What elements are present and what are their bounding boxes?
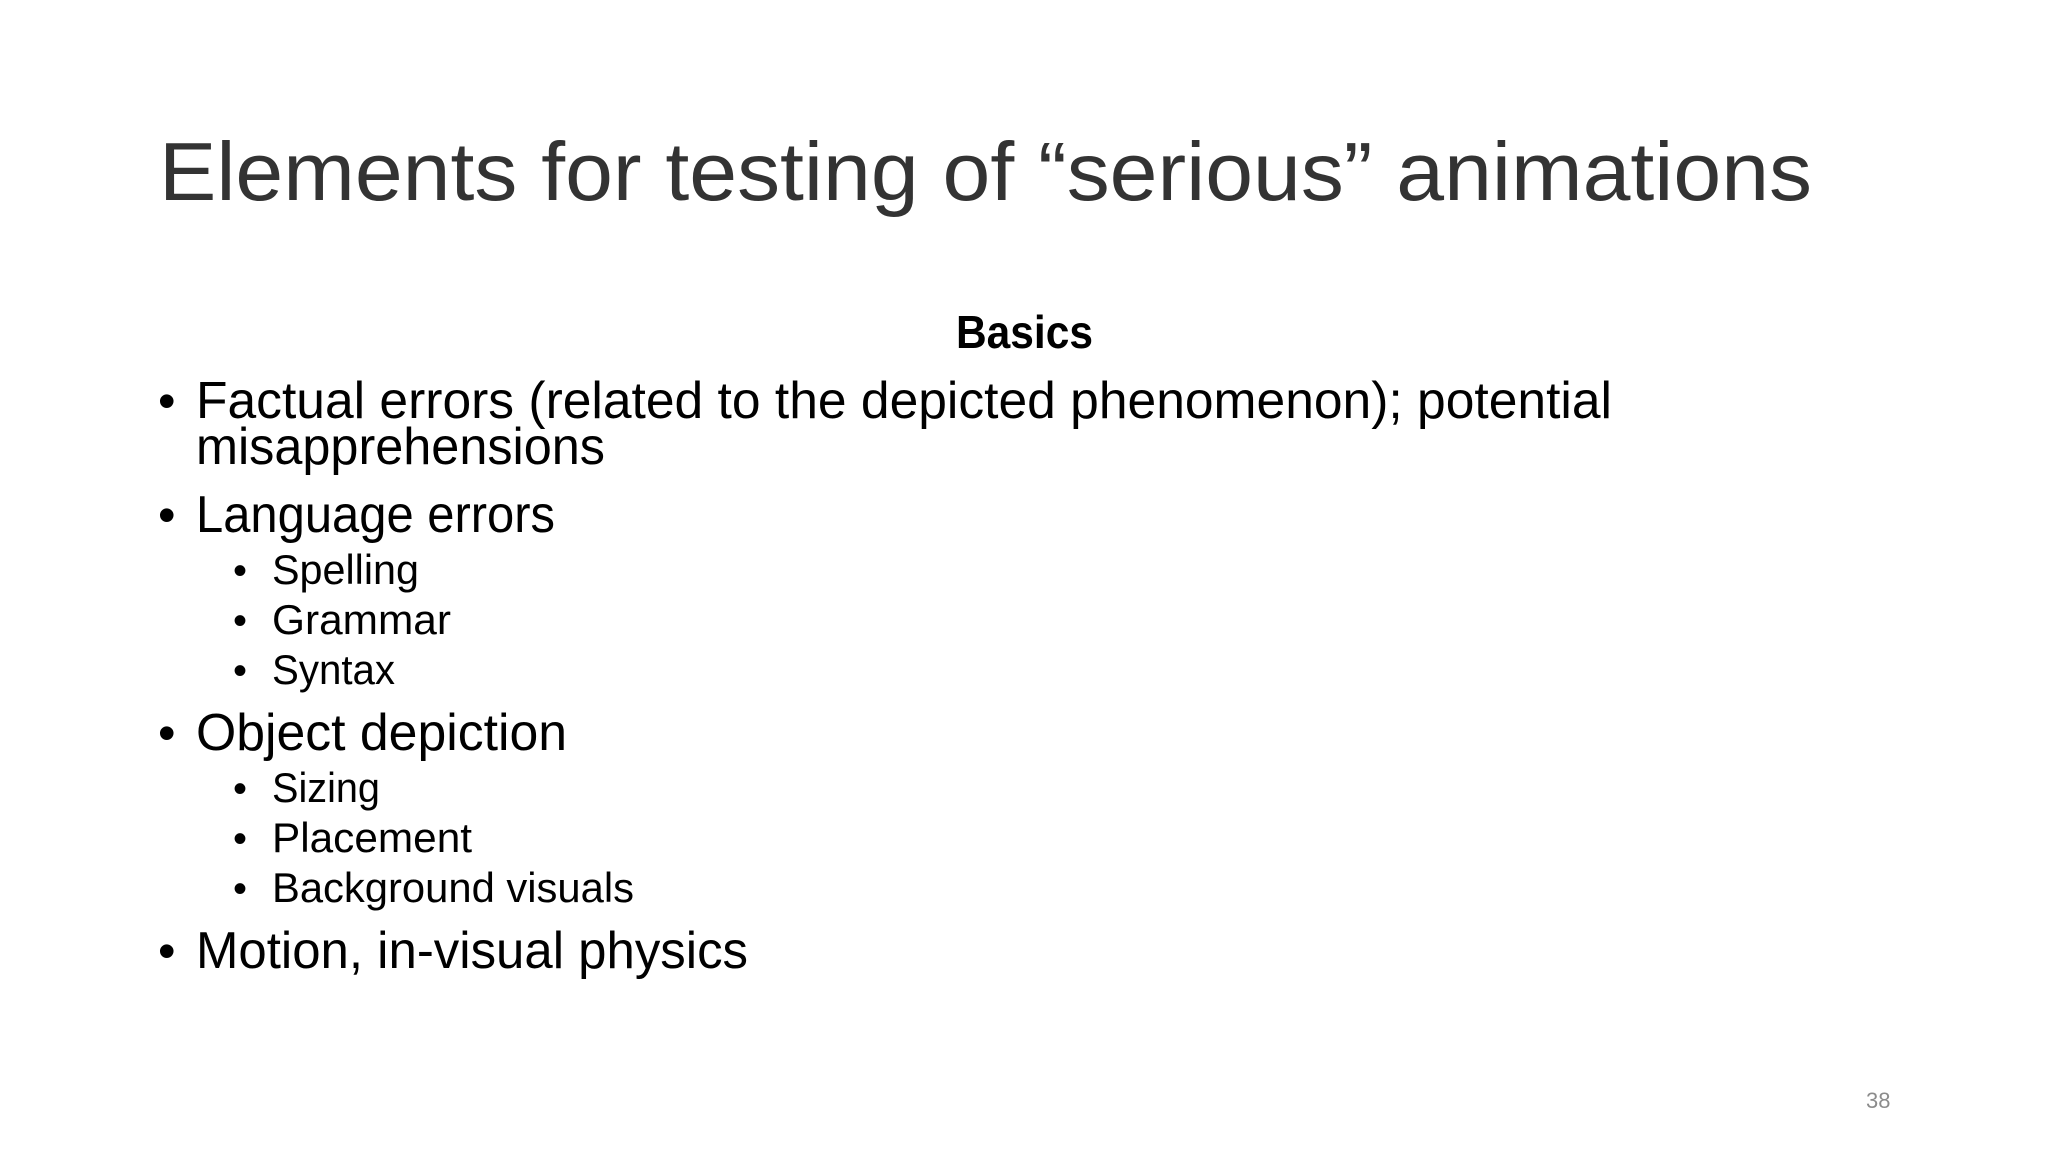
heading: Basics: Basics: [956, 306, 1093, 358]
bullet: language errors: Grammar: [272, 596, 451, 643]
bullet: factual errors: [158, 372, 1612, 476]
bullet: object depiction: •: [233, 867, 247, 911]
bullet: language errors: •: [158, 487, 176, 543]
bullet list: [158, 372, 1612, 980]
bullet: object depiction: •: [233, 817, 247, 861]
page number: 38: [1866, 1088, 1890, 1113]
bullet: object depiction: Placement: [272, 814, 472, 861]
bullet: language errors: Spelling: [272, 546, 419, 593]
bullet: motion: Motion, in-visual physics: [196, 922, 748, 980]
bullet: language errors: •: [233, 599, 247, 643]
bullet: language errors: Language errors: [196, 486, 555, 544]
bullet: object depiction: •: [158, 705, 176, 761]
bullet: factual errors: •: [158, 373, 176, 429]
title: Elements for testing of “serious” animations: [159, 125, 1812, 218]
bullet: object depiction: Sizing: [272, 764, 380, 811]
bullet: language errors: [158, 486, 555, 693]
bullet: object depiction: [158, 704, 634, 911]
bullet: factual errors: misapprehensions: [196, 418, 605, 476]
bullet: language errors: Syntax: [272, 646, 395, 693]
bullet: language errors: •: [233, 649, 247, 693]
bullet: object depiction: Object depiction: [196, 704, 567, 762]
bullet: motion: •: [158, 923, 176, 979]
bullet: language errors: •: [233, 549, 247, 593]
bullet: object depiction: Background visuals: [272, 864, 634, 911]
bullet: object depiction: •: [233, 767, 247, 811]
bullet: factual errors: Factual errors (related to the depicted phenomenon); potential: [196, 372, 1612, 430]
